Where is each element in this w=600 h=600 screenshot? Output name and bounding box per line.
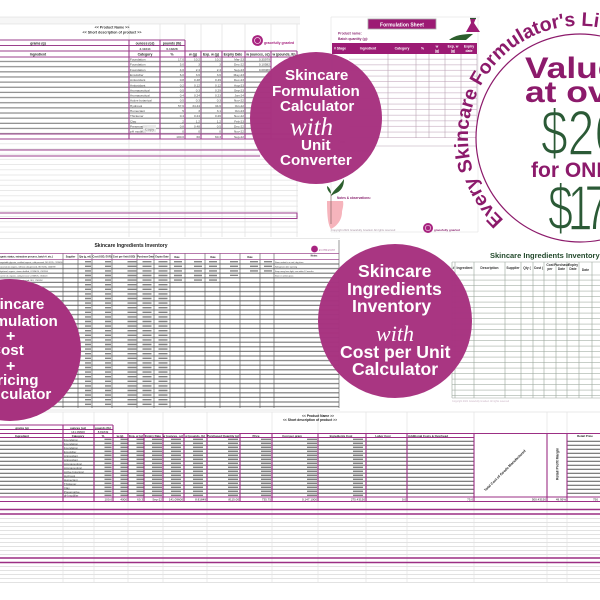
table data: percent, weight, expiry, ounces: 0.35979: [259, 58, 270, 62]
spreadsheet title: << Product Name >>: [95, 26, 129, 30]
table header labels: 2.11644: [139, 47, 151, 51]
table data: percent, weight, expiry, ounces: 0.08466: [259, 68, 270, 72]
blank inventory table: Ingredient: [457, 266, 473, 270]
table data: percent, weight, expiry, ounces: 0.4: [180, 114, 184, 118]
table data: percent, weight, expiry, ounces: Sep-23: [234, 68, 244, 72]
table data: percent, weight, expiry, ounces: 10.2: [194, 58, 200, 62]
sheet title: [368, 19, 436, 29]
circle callout: formulation cost pricing calculator: +: [6, 328, 15, 345]
table data: category: Emulsifier: [130, 73, 144, 77]
logo: gracefully gnarled: [252, 35, 294, 46]
table header labels: [30, 42, 295, 56]
table data: percent, weight, expiry, ounces: 0.5: [217, 124, 221, 128]
inventory description rows: Store sealed in a cool, dry place: [275, 261, 304, 264]
circle callout: skincare ingredients inventory: [318, 244, 472, 398]
table data: percent, weight, expiry, ounces: 100.0: [176, 135, 184, 139]
blank inventory table: Expiry: [568, 263, 578, 267]
pricing categories: Humectant: [64, 478, 78, 482]
inventory description rows: hydrosol, organic, steam distilled, COSMOS, #987654: [0, 270, 49, 273]
table header labels: %: [170, 52, 174, 56]
pricing header labels: w (g): [116, 434, 123, 438]
table data: percent, weight, expiry, ounces: Dec-22: [234, 63, 244, 67]
icon: jar: [466, 18, 480, 32]
pricing categories: Aromaceutical: [64, 466, 82, 470]
pricing header labels: Additional Costs & Overhead: [408, 434, 448, 438]
blank inventory table: Qty (: [523, 266, 532, 270]
blank inventory table: Cost: [546, 263, 555, 267]
table data: percent, weight, expiry, ounces: 0.3: [196, 88, 200, 92]
pricing categories: pH modifier: [64, 494, 78, 498]
circle callout: skincare ingredients inventory: Calculator: [352, 359, 438, 379]
table data: percent, weight, expiry, ounces: 0.48: [194, 124, 200, 128]
table header labels: ounces (oz): [136, 42, 154, 46]
blank inventory table: Date: [569, 267, 577, 271]
table data: percent, weight, expiry, ounces: 0.8: [180, 78, 184, 82]
table data: category: Aromaceutical: [130, 94, 150, 98]
blank inventory table: per: [547, 267, 553, 271]
circle callout: skincare formulation calculator: Unit: [301, 137, 331, 154]
pricing sheet title: << Product Name >>: [302, 414, 334, 418]
table data: percent, weight, expiry, ounces: 0: [198, 130, 200, 134]
table data: percent, weight, expiry, ounces: 0.4: [180, 94, 184, 98]
pricing header labels: Ingredients Cost: [330, 434, 352, 438]
pricing header labels: Cost per gram: [282, 434, 302, 438]
table data: percent, weight, expiry, ounces: 60: [197, 135, 200, 139]
table data: category: pH modifier: [130, 130, 146, 134]
pricing header labels: Ingredient: [15, 434, 29, 438]
inventory numeric columns: [88, 261, 268, 407]
inventory description rows: Refrigerate after opening: [275, 266, 297, 268]
table header and borders: [0, 40, 297, 218]
table data: percent, weight, expiry, ounces: 3: [198, 63, 200, 67]
sheet table: (g): [435, 49, 439, 53]
pricing totals: Sep-22: [152, 498, 162, 502]
pricing header labels: Category: [72, 434, 85, 438]
pricing header labels: Exp. w (g): [129, 434, 143, 438]
sheet table: (g): [451, 49, 455, 53]
inventory header: Cost per Unit (USD): [113, 256, 135, 258]
sheet table: date: [466, 49, 473, 53]
inventory logo: gracefully gnarled: [319, 250, 335, 252]
table data: percent, weight, expiry, ounces: 0: [182, 130, 184, 134]
table data: percent, weight, expiry, ounces: 17.0: [178, 58, 184, 62]
table data: percent, weight, expiry, ounces: 0.5: [180, 99, 184, 103]
pricing header labels: Expiry Date: [145, 434, 161, 438]
pricing totals: 60.3: [137, 498, 143, 502]
circle callout: skincare ingredients inventory: Skincare: [358, 261, 432, 281]
pricing categories: Active botanical: [64, 470, 84, 474]
pricing categories: Antioxidant: [64, 458, 78, 462]
table data: category: Thickener: [130, 114, 144, 118]
table data: percent, weight, expiry, ounces: [176, 58, 270, 139]
sheet table: w: [435, 44, 439, 48]
table data: category: Humectant: [130, 109, 145, 113]
table data: category: Foundation: [130, 58, 146, 62]
table data: percent, weight, expiry, ounces: 60.3: [215, 135, 221, 139]
circle callout: skincare formulation calculator: with: [290, 114, 333, 141]
pricing header labels: Retail Price: [577, 434, 593, 438]
pricing totals: 0.147.1000: [302, 498, 317, 502]
table data: percent, weight, expiry, ounces: 0.10582: [259, 63, 270, 67]
table data: percent, weight, expiry, ounces: 0: [219, 130, 221, 134]
circle callout: skincare ingredients inventory: with: [376, 321, 414, 346]
inventory header: Purchase Date: [137, 256, 154, 258]
table data: category: Hydrosol: [130, 104, 143, 108]
table data: percent, weight, expiry, ounces: 5.0: [180, 63, 184, 67]
panel: ingredients inventory spreadsheet filled: [0, 238, 340, 410]
table data: category: Aromaceutical: [130, 88, 150, 92]
inventory description rows: carrier oil, organic, cold-pressed, COSMOS, #456123: [0, 276, 48, 278]
table data: percent, weight, expiry, ounces: 2: [182, 119, 184, 123]
table data: percent, weight, expiry, ounces: Dec-23: [234, 78, 244, 82]
table data: percent, weight, expiry, ounces: 1.2: [217, 119, 221, 123]
sheet fields: Batch quantity (g):: [338, 37, 368, 41]
table header labels: grams (g): [30, 42, 46, 46]
table data: percent, weight, expiry, ounces: 0.12: [215, 83, 221, 87]
table data: percent, weight, expiry, ounces: 0.23: [215, 94, 221, 98]
pricing header labels: 8.81849: [98, 430, 109, 434]
sheet title: Formulation Sheet: [380, 22, 424, 28]
table data: percent, weight, expiry, ounces: 57.6: [178, 104, 184, 108]
table data: percent, weight, expiry, ounces: 0.48: [194, 78, 200, 82]
table data: category: Foundation: [130, 68, 146, 72]
table header labels: Expiry Date: [224, 52, 242, 56]
pricing totals: 4000: [120, 498, 127, 502]
circle callout: skincare formulation calculator: Calculator: [280, 98, 354, 115]
blank inventory table: Date: [582, 268, 589, 272]
badge value text: [525, 51, 600, 182]
table header labels: pounds (lb): [163, 42, 181, 46]
table data: percent, weight, expiry, ounces: 0.26: [215, 114, 221, 118]
pricing categories: Emulsifier: [64, 450, 76, 454]
sheet fields: Product name:: [338, 32, 362, 36]
inventory header: Cost (USD, EUR): [92, 256, 112, 258]
circle callout: skincare ingredients inventory: Inventory: [352, 296, 431, 316]
inventory description rows: active, organic, solvent extracted, ISO, #741852: [0, 279, 43, 282]
pricing table borders: [0, 425, 600, 562]
circle callout: formulation cost pricing calculator: +: [6, 358, 15, 375]
pricing categories: Hydrosol: [64, 474, 75, 478]
pricing categories: Preservative: [64, 490, 80, 494]
blank inventory title: Skincare Ingredients Inventory: [490, 251, 600, 260]
table data: percent, weight, expiry, ounces: May-23: [234, 73, 244, 77]
table data: percent, weight, expiry, ounces: 0.8: [180, 124, 184, 128]
pricing table rows: [0, 438, 600, 497]
table data: category: Antioxidant: [130, 83, 145, 87]
table data: percent, weight, expiry, ounces: 34.44: [192, 104, 200, 108]
table data: percent, weight, expiry, ounces: Jan-24: [235, 94, 244, 98]
pricing categories: Aromaceutical: [64, 462, 82, 466]
pricing header labels: 141.09600: [71, 430, 85, 434]
table data: percent, weight, expiry, ounces: 0.24: [194, 114, 200, 118]
table data: percent, weight, expiry, ounces: 1.2: [196, 119, 200, 123]
table data: percent, weight, expiry, ounces: 0.3: [196, 99, 200, 103]
table header labels: w (g): [188, 52, 197, 56]
sheet table: Expiry: [464, 44, 474, 48]
table header labels: 0.13228: [166, 47, 178, 51]
badge: lifetime kit value: [454, 12, 600, 244]
spreadsheet title: [83, 26, 141, 34]
pricing totals: 500.43150: [532, 498, 546, 502]
inventory description rows: [0, 261, 314, 282]
pricing totals: 275.43150: [351, 498, 365, 502]
panel: blank ingredients inventory: [452, 251, 600, 403]
pricing totals: 0.0: [402, 498, 406, 502]
sheet table: Category: [395, 46, 409, 50]
sheet footer: [331, 223, 460, 233]
sheet totals and notes: Total: [338, 140, 345, 144]
sheet totals and notes: Formulation method:: [338, 149, 370, 153]
copy tooltip: Copy: [145, 126, 154, 132]
pricing totals: 141.09600: [169, 498, 183, 502]
icon: pink vase with plant: [327, 179, 344, 229]
sheet table: [332, 43, 477, 146]
pricing totals: 75.0: [467, 498, 473, 502]
circle callout: skincare ingredients inventory: Cost per Unit: [340, 342, 451, 362]
pricing categories: Thickener: [64, 482, 76, 486]
blank inventory table: Supplier: [506, 266, 520, 270]
pricing header labels: pounds (lb): [95, 426, 111, 430]
blank inventory table: Cost (: [534, 266, 544, 270]
pricing categories: Clay: [64, 486, 70, 490]
table data: percent, weight, expiry, ounces: Dec-22: [234, 124, 244, 128]
table data: percent, weight, expiry, ounces: 0.2: [180, 83, 184, 87]
inventory header: Supplier: [66, 256, 75, 258]
sheet table: Ingredient: [360, 46, 377, 50]
table header labels: Exp. w (g): [203, 52, 219, 56]
table data: category: [130, 58, 152, 134]
table data: percent, weight, expiry, ounces: 0.5: [180, 88, 184, 92]
table data: percent, weight, expiry, ounces: 3.1: [217, 109, 221, 113]
logo: gracefully gnarled: gracefully gnarled: [264, 41, 294, 45]
table data: percent, weight, expiry, ounces: Sep-22: [234, 135, 244, 139]
table header labels: w (pounds, lb): [272, 52, 295, 56]
pricing header labels: Labor Cost: [375, 434, 391, 438]
inventory logo: [311, 246, 335, 252]
table data: percent, weight, expiry, ounces: Nov-22: [234, 99, 244, 103]
circle callout: skincare formulation calculator: Converter: [280, 152, 352, 169]
inventory description rows: Store in amber glass: [275, 274, 293, 278]
circle callout: skincare formulation calculator: Formulation: [272, 83, 360, 100]
pricing header labels: w (pounds, lb): [184, 434, 205, 438]
spreadsheet title: << Short description of product >>: [83, 30, 141, 34]
pricing totals: 100.0: [104, 498, 112, 502]
inventory header: Date: [174, 256, 180, 259]
pricing sheet title: << Short description of product >>: [283, 418, 337, 422]
table data: percent, weight, expiry, ounces: Oct-22: [235, 104, 244, 108]
blank inventory table: Description: [480, 266, 499, 270]
inventory header: Notes: [311, 254, 318, 258]
table data: percent, weight, expiry, ounces: 3.6: [217, 73, 221, 77]
circle callout: skincare formulation calculator: [250, 52, 382, 184]
sheet footer: Copyright 2021 Gracefully Gnarled. All rights reserved: [331, 228, 396, 232]
icon: leaves: [449, 34, 473, 40]
pricing header labels: Purchased Quantity (g): [207, 434, 239, 438]
panel: formulation cost and pricing spreadsheet: [0, 412, 600, 584]
inventory header: Date: [210, 256, 216, 259]
table data: percent, weight, expiry, ounces: 34.6: [215, 104, 221, 108]
table data: category: Preservative: [130, 124, 147, 128]
pricing sheet title: [283, 414, 337, 422]
table header labels: w (ounces, oz): [245, 52, 270, 56]
circle callout: skincare ingredients inventory: Ingredients: [347, 279, 442, 299]
panel: blank formulation sheet: [327, 17, 480, 233]
table data: percent, weight, expiry, ounces: Oct-23: [235, 109, 244, 113]
pricing totals: 735.75: [262, 498, 271, 502]
inventory header: Date: [247, 256, 253, 259]
table data: percent, weight, expiry, ounces: 2.4: [217, 68, 221, 72]
pricing categories: Foundation: [64, 438, 78, 442]
sheet totals and notes: [337, 140, 371, 200]
blank inventory table: #: [453, 266, 455, 270]
pricing totals: 8115.00: [228, 498, 239, 502]
blank inventory table: Purchase: [554, 263, 569, 267]
blank inventory table: Date: [558, 267, 565, 271]
pricing totals: [104, 498, 598, 502]
circle callout: skincare formulation calculator: Skincare: [285, 67, 348, 84]
pricing totals: 750: [593, 498, 598, 502]
table data: percent, weight, expiry, ounces: 0.24: [194, 94, 200, 98]
table data: percent, weight, expiry, ounces: 0.3: [217, 99, 221, 103]
table data: percent, weight, expiry, ounces: 6.0: [180, 73, 184, 77]
table data: category: Active botanical: [130, 99, 152, 103]
table data: category: Clay: [130, 119, 137, 123]
table data: percent, weight, expiry, ounces: 0.29: [215, 88, 221, 92]
copy tooltip: [143, 125, 156, 132]
inventory description rows: Keep away from light; use within 12 months: [275, 270, 314, 273]
inventory description rows: coconut oil, organic, refined, cold-pressed, ISO 9235, #456789: [0, 266, 56, 268]
sheet table: # Stage: [334, 46, 346, 50]
pricing header labels: w (ounces, oz): [162, 434, 183, 438]
pricing header labels: %: [102, 434, 105, 438]
table data: percent, weight, expiry, ounces: Mar-23: [234, 58, 244, 62]
table data: percent, weight, expiry, ounces: Sep-23: [234, 88, 244, 92]
inventory header: Qty (g, ml): [79, 256, 91, 258]
table data: percent, weight, expiry, ounces: 2.4: [196, 68, 200, 72]
sheet fields: [338, 32, 368, 41]
pricing header labels: grams (g): [15, 426, 29, 430]
table data: percent, weight, expiry, ounces: 0.12: [194, 83, 200, 87]
panel: formulation calculator spreadsheet: [0, 17, 300, 237]
table data: percent, weight, expiry, ounces: 3: [219, 63, 221, 67]
pricing totals: 49.95%: [556, 498, 566, 502]
table data: percent, weight, expiry, ounces: 5: [182, 109, 184, 113]
pricing categories: [64, 438, 84, 498]
sheet table: Exp. w: [448, 44, 459, 48]
sheet footer: gracefully gnarled: [434, 228, 460, 232]
table data: percent, weight, expiry, ounces: Nov-22: [234, 130, 244, 134]
sheet totals and notes: Notes & observations:: [337, 196, 371, 200]
inventory header: [0, 254, 339, 260]
pricing header labels: [15, 426, 593, 438]
pricing categories: Foundation: [64, 446, 78, 450]
table data: percent, weight, expiry, ounces: Feb-23: [234, 119, 244, 123]
table header labels: Category: [138, 52, 152, 56]
table data: percent, weight, expiry, ounces: Aug-23: [234, 83, 244, 87]
rotated header: total cost: Total Cost of Goods Manufactured: [483, 449, 527, 492]
table header labels: Ingredient: [30, 52, 47, 56]
pricing totals: 8.81849: [195, 498, 206, 502]
blank inventory table: [452, 262, 600, 403]
blank inventory table: Copyright 2021 Gracefully Gnarled. All rights reserved: [452, 400, 510, 403]
sheet table: %: [421, 46, 424, 50]
table data: percent, weight, expiry, ounces: 0.49: [215, 78, 221, 82]
pricing categories: Foundation: [64, 442, 78, 446]
circle callout: formulation cost pricing calculator: [0, 279, 81, 421]
pricing header labels: Price: [252, 434, 260, 438]
table data: percent, weight, expiry, ounces: 4.0: [180, 68, 184, 72]
table data: percent, weight, expiry, ounces: Nov-22: [234, 114, 244, 118]
inventory header: Expiry Date: [155, 256, 169, 258]
pricing categories: Antioxidant: [64, 454, 78, 458]
table data: category: Foundation: [130, 63, 146, 67]
inventory description rows: vegetable glycerin, certified organic, cold-pressed, ISO 9235, #123456: [0, 261, 63, 264]
pricing numeric columns: [108, 438, 358, 497]
pricing header labels: ounces (oz): [70, 426, 86, 430]
table data: percent, weight, expiry, ounces: 10.2: [215, 58, 221, 62]
table data: category: Antioxidant: [130, 78, 145, 82]
table data: percent, weight, expiry, ounces: 3.6: [196, 73, 200, 77]
data table rows: [0, 57, 271, 134]
table data: percent, weight, expiry, ounces: 3: [198, 109, 200, 113]
inventory title: Skincare Ingredients Inventory: [94, 243, 168, 249]
rotated header: margin: Retail Profit Margin: [556, 448, 560, 480]
